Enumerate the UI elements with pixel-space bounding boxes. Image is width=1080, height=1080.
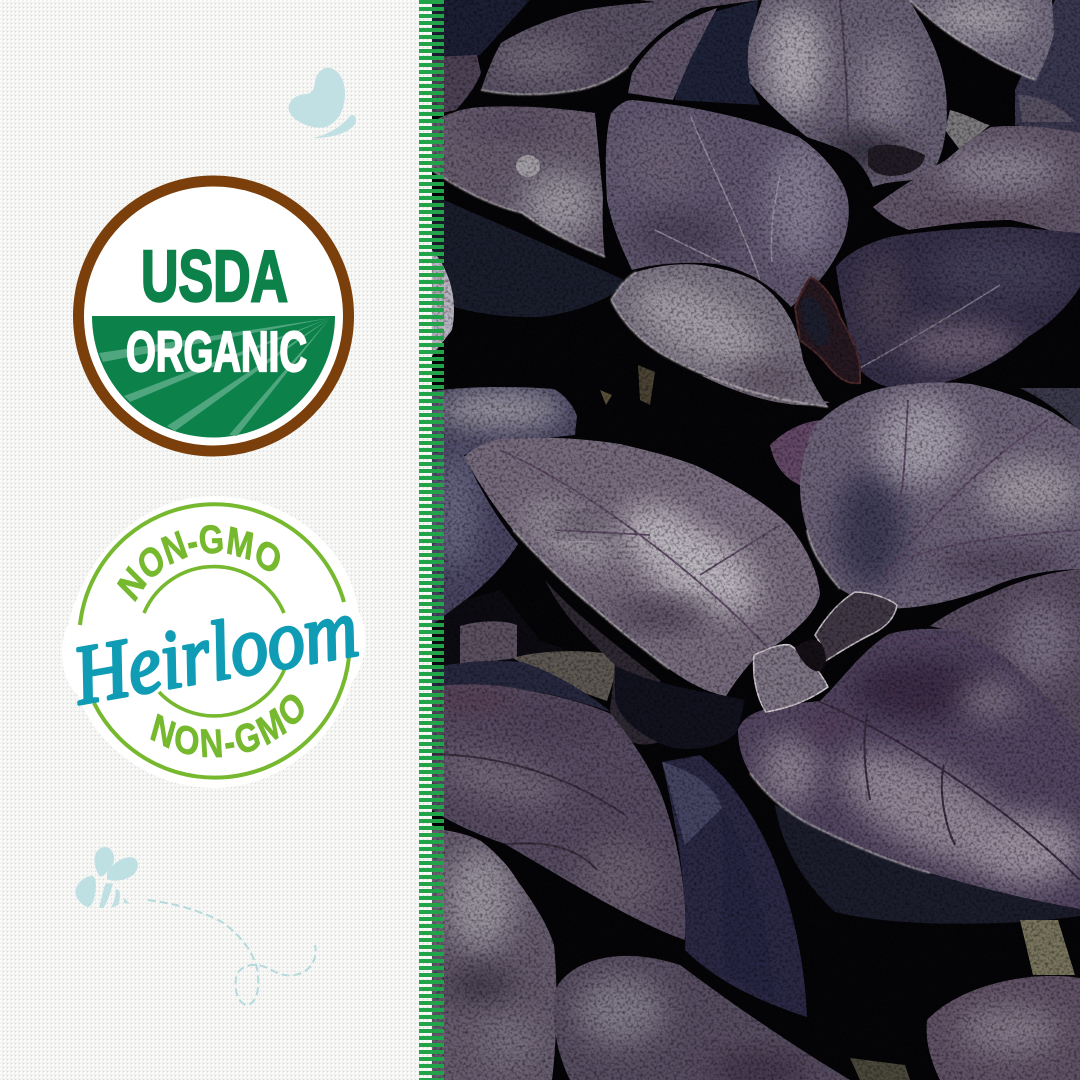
green lower half (92, 316, 335, 438)
green striped divider (419, 0, 444, 1080)
leaf: large right (795, 378, 1080, 613)
leaf: dark mid left (432, 590, 618, 712)
leaf: central small sprout (754, 592, 897, 712)
dark leaf: bottom centre (662, 755, 807, 1017)
leaf: lower left (420, 680, 690, 945)
USDA text: USDA (141, 237, 288, 317)
leaf: bottom centre (554, 956, 850, 1080)
leaf: large lower right (735, 625, 1080, 915)
icon: butterfly (289, 68, 356, 138)
leaf: upper left (430, 100, 610, 260)
leaf: top right (909, 0, 1054, 80)
leaf: bottom right (920, 970, 1080, 1080)
icon: bee with dashed flight path (76, 847, 316, 1005)
leaf: large centre (600, 95, 855, 310)
leaf: top left (481, 2, 702, 94)
leaf: far right (925, 565, 1080, 745)
tan stem pieces (850, 920, 1075, 1080)
leaf: right middle (830, 225, 1080, 395)
USDA Organic seal (78, 181, 348, 451)
bee (76, 847, 138, 908)
leaf: left small (430, 385, 585, 630)
leaf: mid lower (611, 264, 828, 407)
NON-GMO top text: NON-GMO (116, 524, 280, 602)
ORGANIC text: ORGANIC (126, 320, 307, 384)
flight path (148, 900, 316, 1005)
leaf: top centre (748, 0, 947, 187)
shadow leaf: lower right (775, 805, 1080, 924)
leaf rim highlights (432, 0, 1036, 873)
sun rays (99, 318, 330, 436)
seal ring (78, 181, 348, 451)
fabric background panel (0, 0, 432, 1080)
Heirloom script text: Heirloom (66, 582, 364, 723)
photo: purple basil leaves (420, 0, 1080, 1080)
shadow leaf: lower centre (545, 580, 745, 749)
Heirloom Non-GMO seal (62, 496, 366, 788)
leaf: bottom left (430, 820, 560, 1080)
outer and inner rings (80, 504, 349, 778)
leaf: large centre-left (460, 435, 825, 700)
photo grain (432, 0, 1080, 1080)
NON-GMO bottom text: NON-GMO (150, 694, 304, 758)
leaf: right upper (873, 126, 1080, 233)
back shadows (432, 0, 1080, 490)
sticker background (62, 496, 365, 788)
leaf: centre bud (795, 277, 860, 383)
